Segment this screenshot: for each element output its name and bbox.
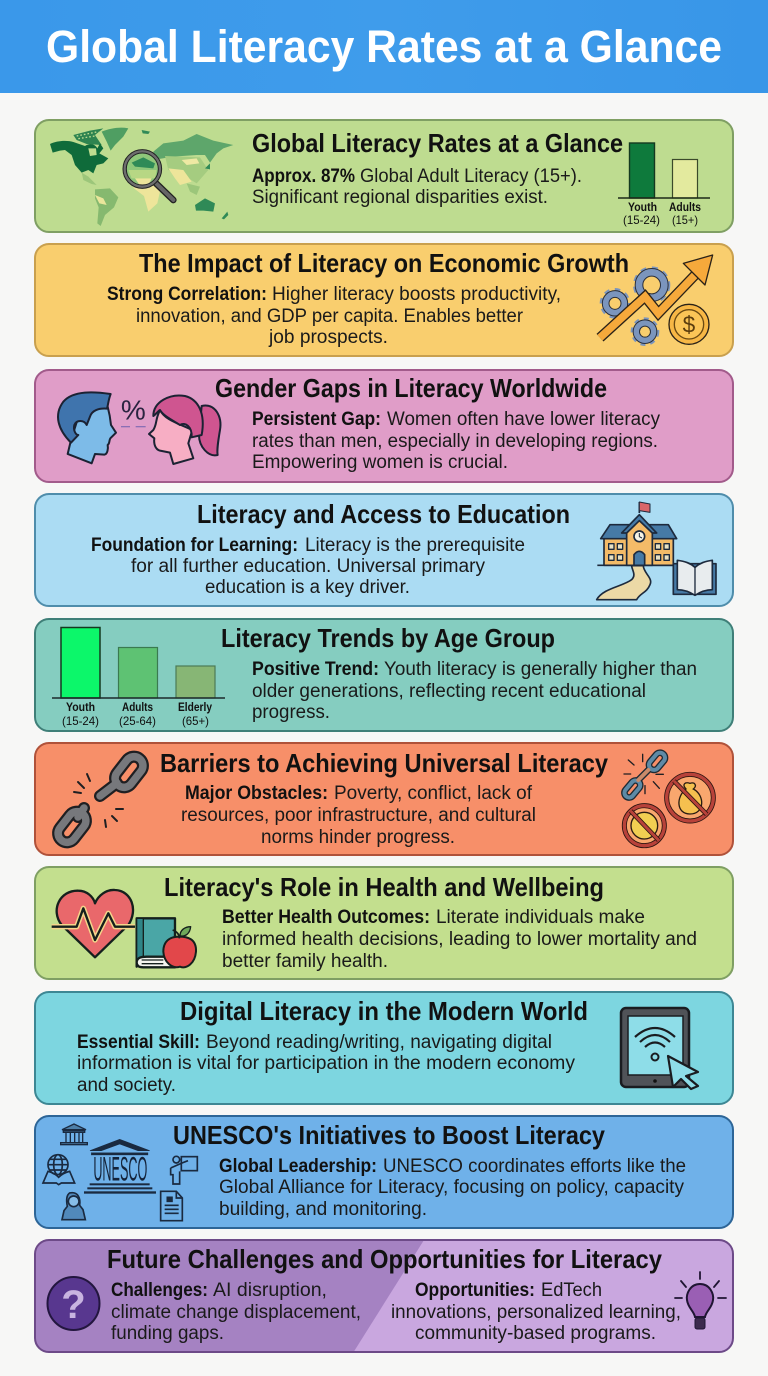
text block	[219, 1156, 686, 1220]
text block: innovation, and GDP per capita. Enables better	[136, 306, 524, 327]
panel: UNESCO initiatives	[35, 1116, 733, 1228]
text block: Literate individuals make	[436, 907, 645, 928]
text block: Global Alliance for Literacy, focusing on policy, capacity	[219, 1177, 684, 1198]
icon: UNESCO temple and related symbols: UNESCO	[93, 1151, 147, 1189]
text block: Literacy is the prerequisite	[305, 535, 525, 556]
panel: barriers	[35, 743, 733, 855]
text block: Global Leadership:	[219, 1156, 377, 1177]
heading: Future Challenges and Opportunities for Literacy	[107, 1244, 662, 1274]
heading: Global Literacy Rates at a Glance	[252, 128, 623, 158]
icon: heart, book and apple	[52, 890, 196, 967]
text block: Strong Correlation:	[107, 284, 267, 305]
text block: for all further education. Universal primary	[131, 556, 485, 577]
bar chart: literacy by age	[52, 628, 225, 728]
text block	[222, 907, 697, 972]
text block: better family health.	[222, 951, 388, 972]
text block: progress.	[252, 702, 330, 723]
bar chart: literacy by age: Youth	[66, 700, 95, 714]
panel: gender gaps	[35, 370, 733, 482]
text block: Approx. 87%	[252, 166, 355, 187]
heading: UNESCO's Initiatives to Boost Literacy	[173, 1120, 605, 1150]
panel: future challenges and opportunities	[35, 1240, 740, 1353]
text block: opportunities: community-based programs.	[415, 1323, 656, 1344]
icon: question mark: ?	[61, 1283, 86, 1327]
text block	[252, 409, 660, 473]
text block: rates than men, especially in developing regions.	[252, 431, 658, 452]
icon: male and female profiles with percent	[58, 392, 220, 464]
heading: Gender Gaps in Literacy Worldwide	[215, 373, 607, 403]
text block: challenges: funding gaps.	[111, 1323, 224, 1344]
panel: economic growth	[35, 244, 733, 356]
text block: information is vital for participation in the modern economy	[77, 1053, 575, 1074]
bar chart: literacy by age: (65+)	[182, 714, 209, 728]
text block: education is a key driver.	[205, 577, 410, 598]
heading: Literacy's Role in Health and Wellbeing	[164, 872, 604, 902]
text block: norms hinder progress.	[261, 827, 455, 848]
icon: gears, growth arrow and coin: $	[683, 311, 696, 337]
text block: Significant regional disparities exist.	[252, 187, 548, 208]
text block: Global Adult Literacy (15+).	[360, 166, 582, 187]
icon: male and female profiles with percent: %	[121, 394, 146, 425]
bar chart: youth vs adults	[618, 143, 710, 227]
text block: Better Health Outcomes:	[222, 907, 430, 928]
icon: light bulb	[675, 1272, 726, 1329]
bar chart: literacy by age: Adults	[122, 700, 153, 714]
bar chart: youth vs adults: Youth	[628, 200, 657, 214]
text block	[77, 1032, 575, 1096]
heading: Literacy and Access to Education	[197, 499, 570, 529]
text block	[107, 284, 561, 348]
text block: job prospects.	[268, 327, 388, 348]
text block	[252, 659, 697, 723]
text block: Poverty, conflict, lack of	[334, 783, 533, 804]
text block	[91, 535, 525, 598]
header banner	[0, 0, 768, 93]
bar chart: literacy by age: (15-24)	[62, 714, 99, 728]
icon: world map with magnifying glass	[50, 128, 233, 226]
text block: challenges: climate change displacement,	[111, 1302, 361, 1323]
text block: opportunities: innovations, personalized learning,	[391, 1302, 681, 1323]
panel: global literacy rates	[35, 120, 733, 232]
text block: Positive Trend:	[252, 659, 379, 680]
heading: Digital Literacy in the Modern World	[180, 996, 588, 1026]
icon: broken chain	[54, 753, 147, 846]
icon: UNESCO temple and related symbols	[43, 1124, 197, 1221]
heading: Barriers to Achieving Universal Literacy	[160, 748, 608, 778]
bar chart: youth vs adults: Adults	[669, 200, 701, 214]
heading: The Impact of Literacy on Economic Growth	[139, 248, 629, 278]
text block: challenges: Challenges:	[111, 1280, 208, 1301]
text block: Empowering women is crucial.	[252, 452, 508, 473]
panel: digital literacy	[35, 992, 733, 1104]
text block: opportunities: EdTech	[541, 1280, 602, 1301]
panel: age group trends	[35, 619, 733, 731]
bar chart: youth vs adults: (15+)	[672, 213, 698, 227]
icon: small chain and prohibited money signs	[623, 751, 713, 846]
text block	[252, 166, 582, 208]
text block: Women often have lower literacy	[387, 409, 660, 430]
icon: gears, growth arrow and coin	[600, 255, 713, 344]
title: Global Literacy Rates at a Glance	[46, 21, 722, 72]
text block: Beyond reading/writing, navigating digital	[206, 1032, 552, 1053]
text block: older generations, reflecting recent educational	[252, 681, 646, 702]
icon: question mark	[48, 1277, 100, 1330]
text block: UNESCO coordinates efforts like the	[383, 1156, 686, 1177]
icon: school, road and book	[597, 502, 716, 600]
text block	[181, 783, 536, 848]
text block: building, and monitoring.	[219, 1199, 427, 1220]
panel: health and wellbeing	[35, 867, 733, 979]
text block: informed health decisions, leading to lower mortality and	[222, 929, 697, 950]
bar chart: youth vs adults: (15-24)	[623, 213, 660, 227]
text block: opportunities: Opportunities:	[415, 1280, 535, 1301]
bar chart: literacy by age: Elderly	[178, 700, 212, 714]
icon: tablet with wifi and cursor	[621, 1008, 698, 1089]
text block: Foundation for Learning:	[91, 535, 298, 556]
heading: Literacy Trends by Age Group	[221, 623, 555, 653]
text block: Essential Skill:	[77, 1032, 200, 1053]
text block: opportunities	[391, 1280, 681, 1344]
text block: Higher literacy boosts productivity,	[272, 284, 561, 305]
text block: resources, poor infrastructure, and cultural	[181, 805, 536, 826]
text block: Persistent Gap:	[252, 409, 381, 430]
text block: Major Obstacles:	[185, 783, 328, 804]
text block: and society.	[77, 1075, 176, 1096]
panel: access to education	[35, 494, 733, 606]
text block: challenges	[111, 1280, 361, 1344]
text block: challenges: AI disruption,	[213, 1280, 327, 1301]
bar chart: literacy by age: (25-64)	[119, 714, 156, 728]
text block: Youth literacy is generally higher than	[384, 659, 697, 680]
